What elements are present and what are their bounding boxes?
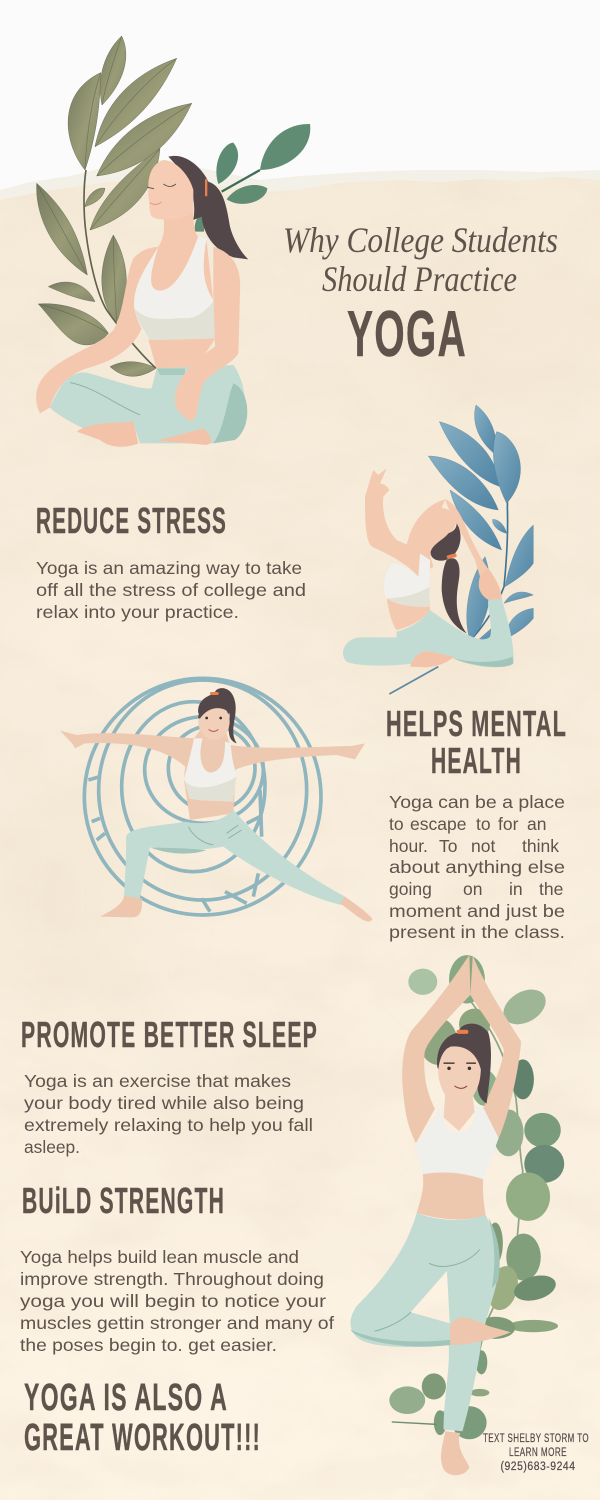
contact text: (925)683-9244 <box>500 1461 576 1473</box>
text: build strength: yoga you will begin to notice your <box>20 1291 326 1311</box>
text: helps mental health: an <box>527 814 546 834</box>
text: helps mental health: present in the class. <box>389 922 565 942</box>
text: reduce stress: relax into your practice. <box>36 602 239 622</box>
text: helps mental health: for <box>498 814 519 834</box>
text: helps mental health: hour. <box>389 836 428 856</box>
text: promote better sleep <box>24 1071 313 1157</box>
body: left arm <box>36 258 142 413</box>
illustration: seated meditation with leaves <box>36 36 310 447</box>
sports bra <box>134 236 216 340</box>
heading: reduce stress: REDUCE STRESS <box>36 500 227 541</box>
hair <box>437 1024 491 1104</box>
hair tie <box>205 179 207 196</box>
feet <box>77 422 211 447</box>
hair back <box>168 156 248 259</box>
text: reduce stress <box>36 558 306 622</box>
text: reduce stress: off all the stress of college and <box>36 580 306 600</box>
callout: great workout: YOGA IS ALSO A <box>24 1377 228 1419</box>
text: promote better sleep: asleep. <box>24 1137 80 1157</box>
illustration: tree pose with leaves <box>350 955 564 1475</box>
text: promote better sleep: extremely relaxing to help you fall <box>24 1115 313 1135</box>
icon: green leaves <box>195 124 310 232</box>
sports bra <box>184 738 237 802</box>
body and arms <box>365 468 502 630</box>
title: Should Practice <box>322 259 517 299</box>
text: helps mental health: going <box>389 879 432 899</box>
title: YOGA <box>347 297 467 370</box>
text: helps mental health: about anything else <box>389 857 565 877</box>
text: build strength: Yoga helps build lean muscle and <box>20 1247 299 1267</box>
text: build strength: improve strength. Throughout doing <box>20 1269 324 1289</box>
head and hair <box>198 688 237 743</box>
text: helps mental health: Yoga can be a place <box>389 792 565 812</box>
feet <box>100 896 372 922</box>
rings <box>84 678 321 915</box>
text: build strength <box>20 1247 334 1355</box>
contact text: LEARN MORE <box>509 1447 567 1459</box>
text: helps mental health: escape <box>410 814 466 834</box>
text: helps mental health <box>389 792 565 942</box>
text: helps mental health: in <box>509 879 523 899</box>
text: promote better sleep: Yoga is an exercise that makes <box>24 1071 291 1091</box>
text: build strength: the poses begin to. get easier. <box>20 1335 277 1355</box>
text: helps mental health: moment and just be <box>389 901 565 921</box>
arms <box>402 955 521 1143</box>
text: helps mental health: the <box>539 879 563 899</box>
hair back <box>442 558 467 633</box>
heading: promote better sleep: PROMOTE BETTER SLEEP <box>21 1014 318 1055</box>
facial features <box>147 184 176 204</box>
callout: great workout: GREAT WORKOUT!!! <box>24 1417 261 1459</box>
leggings <box>124 810 345 905</box>
text: helps mental health: not <box>471 836 495 856</box>
illustration: warrior pose with rings <box>60 678 372 922</box>
text: helps mental health: to <box>389 814 404 834</box>
text: promote better sleep: your body tired while also being <box>24 1093 304 1113</box>
torso and neck <box>184 723 236 820</box>
text: helps mental health: To <box>439 836 457 856</box>
text: build strength: muscles gettin stronger and many of <box>20 1313 334 1333</box>
sports bra <box>384 553 430 607</box>
text: helps mental health: on <box>463 879 482 899</box>
callout: great workout <box>24 1377 261 1459</box>
icon: blue leaf branch <box>389 405 533 694</box>
illustration: mermaid pose with blue leaves <box>343 405 533 694</box>
sports bra <box>415 1104 499 1179</box>
leggings <box>50 365 247 443</box>
hair tie <box>457 1030 468 1034</box>
leggings <box>343 598 514 667</box>
heading: helps mental health: HEALTH <box>431 740 522 781</box>
leggings <box>350 1213 500 1431</box>
text: reduce stress: Yoga is an amazing way to take <box>36 558 302 578</box>
icon: olive leaf branch <box>37 36 192 376</box>
text: helps mental health: to <box>476 814 491 834</box>
feet <box>410 568 502 667</box>
text: helps mental health: think <box>522 836 559 856</box>
body: midriff <box>148 337 216 369</box>
heading: helps mental health <box>386 703 567 781</box>
right arm <box>175 247 240 422</box>
title: Why College Students <box>283 220 558 260</box>
facial features <box>444 1062 476 1088</box>
contact text <box>483 1433 589 1473</box>
midriff <box>417 1173 486 1219</box>
title <box>283 220 558 370</box>
arms <box>60 731 365 770</box>
feet <box>441 1318 511 1475</box>
torn white top <box>0 0 600 200</box>
heading: build strength: BUiLD STRENGTH <box>22 1180 225 1221</box>
icon: eucalyptus leaves <box>389 955 564 1439</box>
body: shoulders and chest <box>133 207 213 308</box>
face and neck <box>438 1046 481 1131</box>
face <box>148 160 193 220</box>
hair and tie <box>431 523 461 561</box>
